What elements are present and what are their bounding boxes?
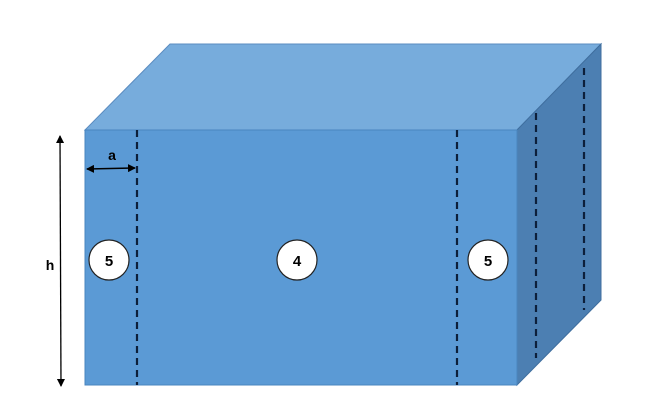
arrow: width a [87,147,135,169]
circle label: 5 right [468,240,508,280]
circle label: 4 center [277,240,317,280]
circle label: 4 center: 4 [293,253,302,270]
arrow: width a: a [108,147,116,163]
arrow: height h: h [46,257,54,273]
right face [517,44,601,385]
front face [85,130,517,385]
top face [85,44,601,130]
circle label: 5 right: 5 [484,253,492,270]
dashed lines: zone boundaries [137,68,584,385]
box: 3D block [85,44,601,385]
circle label: 5 left: 5 [105,253,113,270]
circle label: 5 left [89,240,129,280]
